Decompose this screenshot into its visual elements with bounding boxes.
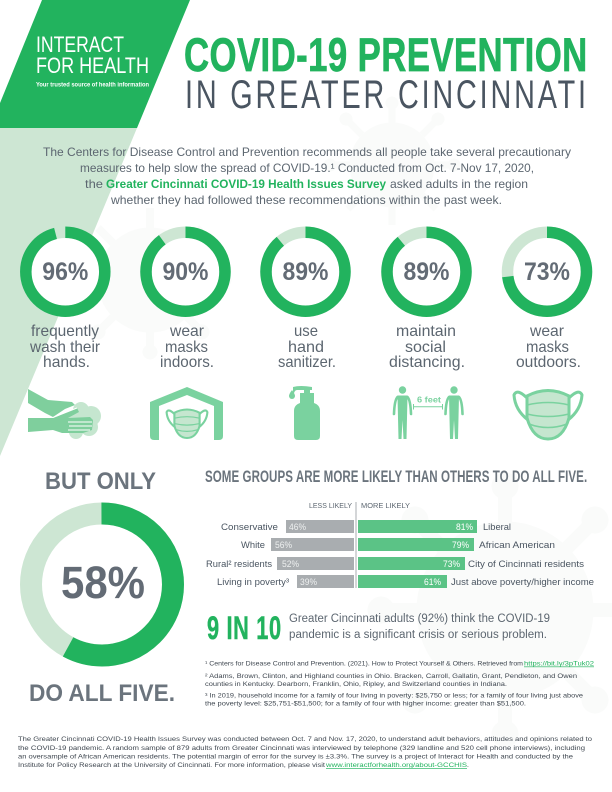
footnotes: https://bit.ly/3pTuk02 xyxy=(524,660,594,668)
bar chart: likelihood by group: Rural² residents xyxy=(206,559,272,570)
stat: 89% social distancing: social xyxy=(405,339,446,356)
stat: 90% masks indoors xyxy=(146,232,225,371)
donut: 58% do all five: 58% xyxy=(61,557,145,608)
stat: 73% masks outdoors: outdoors. xyxy=(516,354,581,371)
stat: 89% hand sanitizer: hand xyxy=(288,339,324,356)
footer methodology note: Institute for Policy Research at the University of Cincinnati. For more information, please visit xyxy=(18,762,325,769)
stat: 89% social distancing: maintain xyxy=(396,323,456,340)
bar chart: likelihood by group: 52% xyxy=(282,559,299,570)
logo: Interact for Health xyxy=(36,32,149,88)
bar chart: likelihood by group: African American xyxy=(479,540,555,551)
footnotes: counties in Kentucky. Dearborn, Franklin, Ohio, Ripley, and Switzerland counties in Indiana. xyxy=(205,681,507,688)
stat: 89% social distancing: 89% xyxy=(404,258,450,286)
intro paragraph: measures to help slow the spread of COVID-19.¹ Conducted from Oct. 7-Nov 17, 2020, xyxy=(80,162,534,175)
stat: 89% hand sanitizer xyxy=(266,232,345,371)
footer methodology note: an oversample of African American residents. The potential margin of error for the survey is ±3.3%. The survey is a project of Interact for Health and conducted by the xyxy=(18,754,573,760)
footnotes: ¹ Centers for Disease Control and Prevention. (2021). How to Protect Yourself & Others. Retrieved from xyxy=(205,660,524,668)
icon: face mask xyxy=(514,390,582,439)
bar chart: likelihood by group: 56% xyxy=(275,540,292,551)
intro paragraph: asked adults in the region xyxy=(390,178,528,191)
bar chart: likelihood by group: 39% xyxy=(300,577,317,588)
footer methodology note: www.interactforhealth.org/about-GCCHIS xyxy=(325,762,468,769)
intro paragraph: Greater Cincinnati COVID-19 Health Issues Survey xyxy=(106,178,386,191)
stat: 73% masks outdoors: 73% xyxy=(524,258,570,286)
bar chart: likelihood by group: MORE LIKELY xyxy=(361,501,410,510)
bar chart: likelihood by group: 81% xyxy=(456,522,473,533)
stat: 90% masks indoors: indoors. xyxy=(160,354,214,371)
title: COVID-19 PREVENTION xyxy=(184,29,587,81)
bar chart: likelihood by group: Liberal xyxy=(483,522,511,533)
footnotes: ³ In 2019, household income for a family of four living in poverty: $25,750 or less; for a family of four living just above xyxy=(205,692,583,700)
stat: 89% hand sanitizer: 89% xyxy=(282,258,328,286)
stat: 96% wash hands xyxy=(26,232,105,371)
icon: two people six feet apart: 6 feet xyxy=(417,394,441,404)
stat: 90% masks indoors: 90% xyxy=(162,258,208,286)
stat: 89% hand sanitizer: sanitizer. xyxy=(278,354,336,371)
bar chart: likelihood by group: Conservative xyxy=(221,522,278,533)
bar chart: likelihood by group: White xyxy=(241,540,265,551)
stat: 96% wash hands: 96% xyxy=(42,258,88,286)
bar chart: likelihood by group: 46% xyxy=(289,522,306,533)
intro paragraph: the xyxy=(85,178,103,191)
icon: washing hands xyxy=(28,389,101,439)
footer methodology note: . xyxy=(467,762,469,769)
heading: do all five: DO ALL FIVE. xyxy=(29,680,175,707)
stat: 89% social distancing: distancing. xyxy=(389,354,465,371)
callout: 9 in 10: 9 IN 10 xyxy=(207,610,281,646)
stat: 73% masks outdoors: wear xyxy=(529,323,565,340)
footnotes: the poverty level: $25,751-$51,500; for a family of four with higher income: greater than $51,500. xyxy=(205,700,526,708)
bar chart: likelihood by group: Just above poverty/higher income xyxy=(451,577,594,588)
icon: sanitizer bottle xyxy=(289,386,320,440)
bar chart: likelihood by group: Living in poverty³ xyxy=(217,577,289,588)
stat: 96% wash hands: hands. xyxy=(43,354,90,371)
stat: 90% masks indoors: masks xyxy=(165,339,208,356)
stat: 96% wash hands: frequently xyxy=(31,323,99,340)
footnotes: ² Adams, Brown, Clinton, and Highland counties in Ohio. Bracken, Carroll, Gallatin, Grant, Pendleton, and Owen xyxy=(205,673,577,680)
logo: Interact for Health: FOR HEALTH xyxy=(36,53,149,78)
heading: some groups: SOME GROUPS ARE MORE LIKELY THAN OTHERS TO DO ALL FIVE. xyxy=(205,468,587,487)
stat: 90% masks indoors: wear xyxy=(169,323,205,340)
stat: 89% hand sanitizer: use xyxy=(294,323,318,340)
footer methodology note: The Greater Cincinnati COVID-19 Health Issues Survey was conducted between Oct. 7 and Nov. 17, 2020, to understand adult behaviors, attitudes and opinions related to xyxy=(18,736,592,743)
bar chart: likelihood by group: 61% xyxy=(424,577,441,588)
intro paragraph xyxy=(43,146,571,207)
heading: but only: BUT ONLY xyxy=(45,468,156,495)
callout: 9 in 10 xyxy=(207,610,550,646)
intro paragraph: whether they had followed these recommendations within the past week. xyxy=(110,194,502,207)
logo: Interact for Health: INTERACT xyxy=(36,32,124,57)
callout: 9 in 10: pandemic is a significant crisis or serious problem. xyxy=(289,629,547,641)
background: pale virus shapes xyxy=(69,97,612,747)
stat: 89% social distancing xyxy=(387,232,466,371)
bar chart: likelihood by group xyxy=(206,501,594,588)
bar chart: likelihood by group: LESS LIKELY xyxy=(309,501,352,510)
banner: green logo block xyxy=(0,0,190,128)
stat: 73% masks outdoors: masks xyxy=(526,339,569,356)
logo: Interact for Health: Your trusted source of health information xyxy=(36,82,149,88)
callout: 9 in 10: Greater Cincinnati adults (92%) think the COVID-19 xyxy=(289,613,550,625)
donut: 58% do all five xyxy=(31,514,173,656)
stat: 73% masks outdoors xyxy=(508,232,586,371)
intro paragraph: The Centers for Disease Control and Prevention recommends all people take several precautionary xyxy=(43,146,571,159)
title: IN GREATER CINCINNATI xyxy=(185,72,586,117)
footer methodology note xyxy=(18,736,592,769)
bar chart: likelihood by group: City of Cincinnati residents xyxy=(468,559,584,570)
title xyxy=(184,29,587,117)
footnotes xyxy=(205,660,594,708)
bar chart: likelihood by group: 79% xyxy=(452,540,469,551)
footer methodology note: the COVID-19 pandemic. A random sample of 879 adults from Greater Cincinnati was interviewed by telephone (329 landline and 520 cell phone interviews), including xyxy=(18,745,585,752)
stat: 96% wash hands: wash their xyxy=(29,339,101,356)
icon: house with mask xyxy=(150,387,223,440)
icon: two people six feet apart xyxy=(394,386,462,439)
background: light green diagonal band xyxy=(0,128,137,456)
bar chart: likelihood by group: 73% xyxy=(443,559,460,570)
